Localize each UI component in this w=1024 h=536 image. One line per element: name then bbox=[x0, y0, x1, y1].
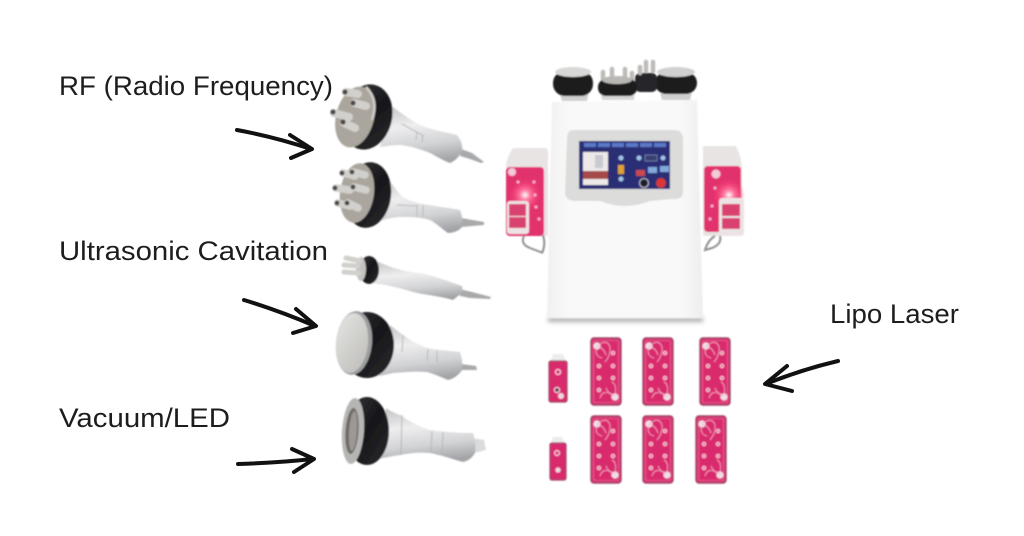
handpiece: vacuum/LED bbox=[340, 397, 486, 465]
shadow under console bbox=[548, 317, 703, 322]
arrow: RF bbox=[237, 130, 312, 158]
small pad bottom bbox=[550, 437, 566, 480]
laser pads group bbox=[549, 338, 730, 483]
right laser paddles bbox=[703, 146, 745, 250]
label: Vacuum/LED: Vacuum/LED bbox=[59, 403, 230, 433]
handpiece: small ultrasonic probe bbox=[344, 256, 491, 300]
small pad top bbox=[549, 354, 567, 402]
handpiece: RF four-pin top bbox=[329, 79, 484, 163]
touch screen bbox=[579, 141, 670, 189]
large pad row 1 bbox=[591, 338, 621, 405]
label: Ultrasonic Cavitation: Ultrasonic Cavitation bbox=[59, 236, 328, 266]
arrow: ultrasonic cavitation bbox=[244, 300, 316, 333]
handpiece: ultrasonic cavitation large disc bbox=[333, 309, 477, 380]
docked handpieces on top bbox=[553, 62, 697, 101]
left laser paddles bbox=[506, 148, 548, 253]
large pad row 2 bbox=[591, 416, 621, 483]
machine console bbox=[506, 62, 745, 322]
handpiece: RF six-pin lower bbox=[333, 159, 484, 233]
arrow: lipo laser bbox=[765, 361, 838, 391]
label: Lipo Laser: Lipo Laser bbox=[830, 299, 959, 329]
console body bbox=[547, 100, 703, 318]
arrow: vacuum/LED bbox=[238, 449, 314, 472]
control panel bezel bbox=[565, 130, 683, 206]
label: RF (Radio Frequency): RF (Radio Frequency) bbox=[59, 71, 333, 101]
